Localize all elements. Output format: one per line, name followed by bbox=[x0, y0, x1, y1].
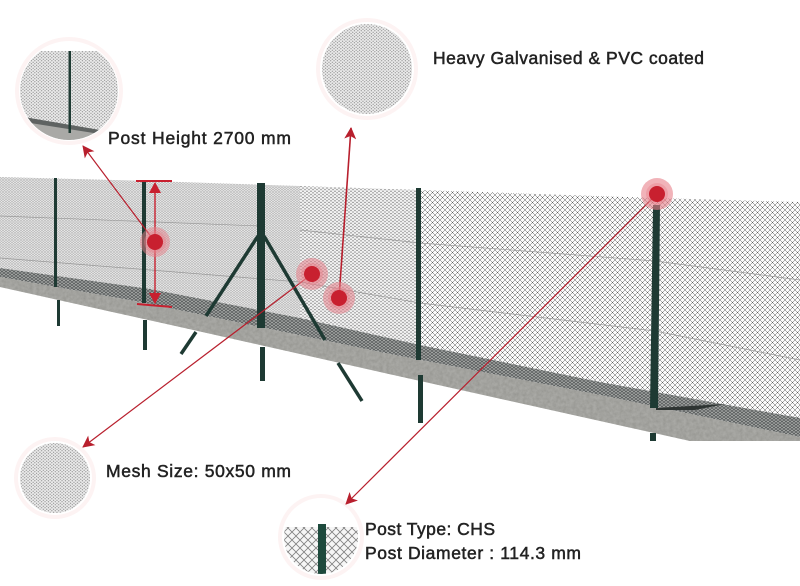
label: Mesh Size: 50x50 mm bbox=[106, 461, 291, 481]
inset circle: mesh size bbox=[14, 437, 96, 519]
label: Heavy Galvanised & PVC coated bbox=[433, 48, 704, 68]
inset circle: post height bbox=[15, 37, 125, 145]
post base shadow bbox=[656, 404, 725, 410]
dimension line: post height bbox=[136, 181, 172, 307]
arrow: to coating inset bbox=[339, 128, 351, 298]
callout: post height bbox=[15, 37, 291, 148]
fence assembly bbox=[0, 177, 800, 445]
inset circle: coating bbox=[316, 18, 418, 120]
callout: coating bbox=[316, 18, 704, 120]
hotspot: post type bbox=[641, 178, 673, 210]
mesh panel bbox=[0, 177, 800, 418]
arrow: to post type inset bbox=[346, 194, 657, 504]
hotspot: post height bbox=[140, 227, 170, 257]
label: Post Height 2700 mm bbox=[108, 128, 291, 148]
fence posts bbox=[54, 178, 660, 441]
callout: post type bbox=[278, 494, 495, 580]
concrete plinth bbox=[0, 270, 800, 445]
callout: mesh size bbox=[14, 437, 291, 519]
leader arrows bbox=[83, 128, 657, 504]
arrow: to mesh inset bbox=[83, 274, 312, 447]
mesh shadow band on concrete bbox=[0, 268, 800, 437]
brace struts bbox=[181, 236, 362, 401]
arrow: to post height inset bbox=[83, 146, 155, 242]
hotspot: coating bbox=[323, 282, 355, 314]
label: post type: Post Type: CHS bbox=[365, 519, 495, 539]
inset circle: post type bbox=[278, 494, 364, 580]
label: post diameter: Post Diameter : 114.3 mm bbox=[365, 543, 581, 563]
hotspot: mesh size bbox=[296, 258, 328, 290]
